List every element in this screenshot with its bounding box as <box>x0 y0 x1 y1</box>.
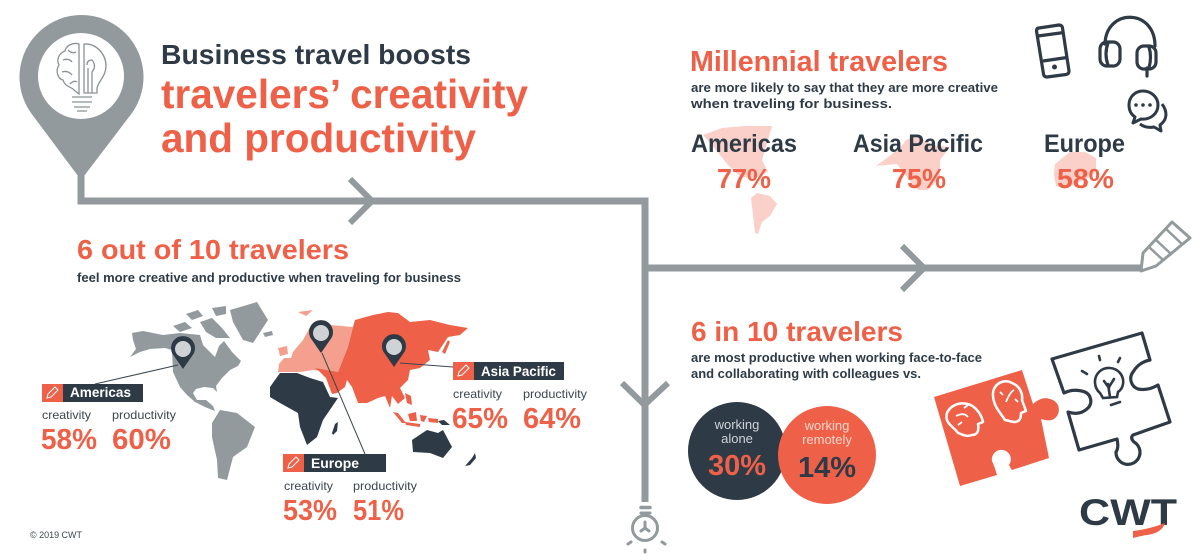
circle: working alone: working <box>714 417 759 432</box>
panel: millennial Europe: 58% <box>1057 163 1114 194</box>
icon: orange puzzle piece with heads <box>934 370 1059 486</box>
heading: 6 in 10 travelers: and collaborating with colleagues vs. <box>691 367 921 381</box>
circle: working remotely: remotely <box>802 432 852 447</box>
pin: Asia Pacific <box>382 334 406 367</box>
panel: millennial Asia Pacific: 75% <box>892 163 946 194</box>
heading: Millennial travelers: are more likely to say that they are more creative <box>691 81 998 95</box>
heading: 6 in 10 travelers <box>691 316 982 381</box>
pin: Americas <box>171 336 195 369</box>
panel: Asia Pacific stats: Asia Pacific <box>481 363 556 379</box>
circle: working alone <box>688 402 786 500</box>
panel: Asia Pacific stats <box>452 362 587 435</box>
map: Africa and Oceania <box>270 373 476 466</box>
leader lines <box>95 353 453 454</box>
title: travelers’ creativity <box>161 71 528 117</box>
panel: Europe stats: creativity <box>284 479 333 493</box>
icon: light bulb <box>628 508 665 552</box>
panel: Europe stats: productivity <box>353 479 417 493</box>
heading: Millennial travelers <box>690 46 998 111</box>
icon: headphones <box>1100 17 1156 76</box>
heading: 6 in 10 travelers: 6 in 10 travelers <box>691 316 903 347</box>
panel: millennial Europe <box>1044 130 1125 194</box>
heading: Millennial travelers: when traveling for business. <box>690 97 892 111</box>
title: Business travel boosts <box>161 39 471 70</box>
panel: Europe stats: 53% <box>283 495 337 527</box>
copyright: © 2019 CWT <box>30 530 82 540</box>
pin: Europe <box>309 320 333 353</box>
panel: Asia Pacific stats: 65% <box>452 403 508 435</box>
panel: Asia Pacific stats: 64% <box>523 403 581 435</box>
icon: location pin with brain bulb <box>19 15 144 180</box>
icon: chat bubbles <box>1129 91 1166 131</box>
title: and productivity <box>161 115 476 161</box>
panel: Europe stats: 51% <box>353 495 404 527</box>
panel: Europe stats <box>283 454 417 527</box>
heading: 6 in 10 travelers: are most productive when working face-to-face <box>691 351 982 365</box>
heading: Millennial travelers: Millennial travelers <box>690 46 948 78</box>
panel: Americas stats: productivity <box>112 408 176 422</box>
circle: working remotely <box>778 406 876 504</box>
panel: Europe stats: Europe <box>311 455 359 471</box>
panel: Asia Pacific stats: creativity <box>453 387 502 401</box>
map: Europe <box>278 310 353 372</box>
icon: pencil <box>1141 222 1190 271</box>
panel: millennial Asia Pacific: Asia Pacific <box>853 130 983 158</box>
panel: millennial Americas: Americas <box>691 130 797 158</box>
panel: Americas stats: 58% <box>41 424 97 456</box>
logo: CWT: CWT <box>1079 492 1177 533</box>
circle: working alone: 30% <box>708 450 766 482</box>
journey path <box>81 170 1142 502</box>
panel: Asia Pacific stats: productivity <box>523 387 587 401</box>
circle: working alone: alone <box>721 431 753 446</box>
panel: millennial Americas: 77% <box>717 163 771 194</box>
circle: working remotely: 14% <box>798 452 856 484</box>
panel: millennial Europe: Europe <box>1044 130 1125 158</box>
panel: Americas stats <box>41 384 176 456</box>
panel: Americas stats: 60% <box>112 424 171 456</box>
icon: phone <box>1036 25 1069 77</box>
panel: Americas stats: Americas <box>70 384 131 400</box>
heading: 6 out of 10 travelers: 6 out of 10 travelers <box>77 234 349 265</box>
heading: 6 out of 10 travelers <box>77 234 461 285</box>
panel: Americas stats: creativity <box>42 408 91 422</box>
heading: 6 out of 10 travelers: feel more creative and productive when traveling for business <box>77 271 461 285</box>
pale regional maps <box>703 126 1096 234</box>
circle: working remotely: working <box>804 418 849 433</box>
world map <box>130 302 476 480</box>
map: Americas <box>130 302 273 480</box>
map: Asia Pacific <box>315 312 468 427</box>
panel: millennial Asia Pacific <box>853 130 983 194</box>
title <box>161 39 528 161</box>
icon: outlined puzzle piece with bulb <box>1052 333 1170 464</box>
panel: millennial Americas <box>691 130 797 194</box>
